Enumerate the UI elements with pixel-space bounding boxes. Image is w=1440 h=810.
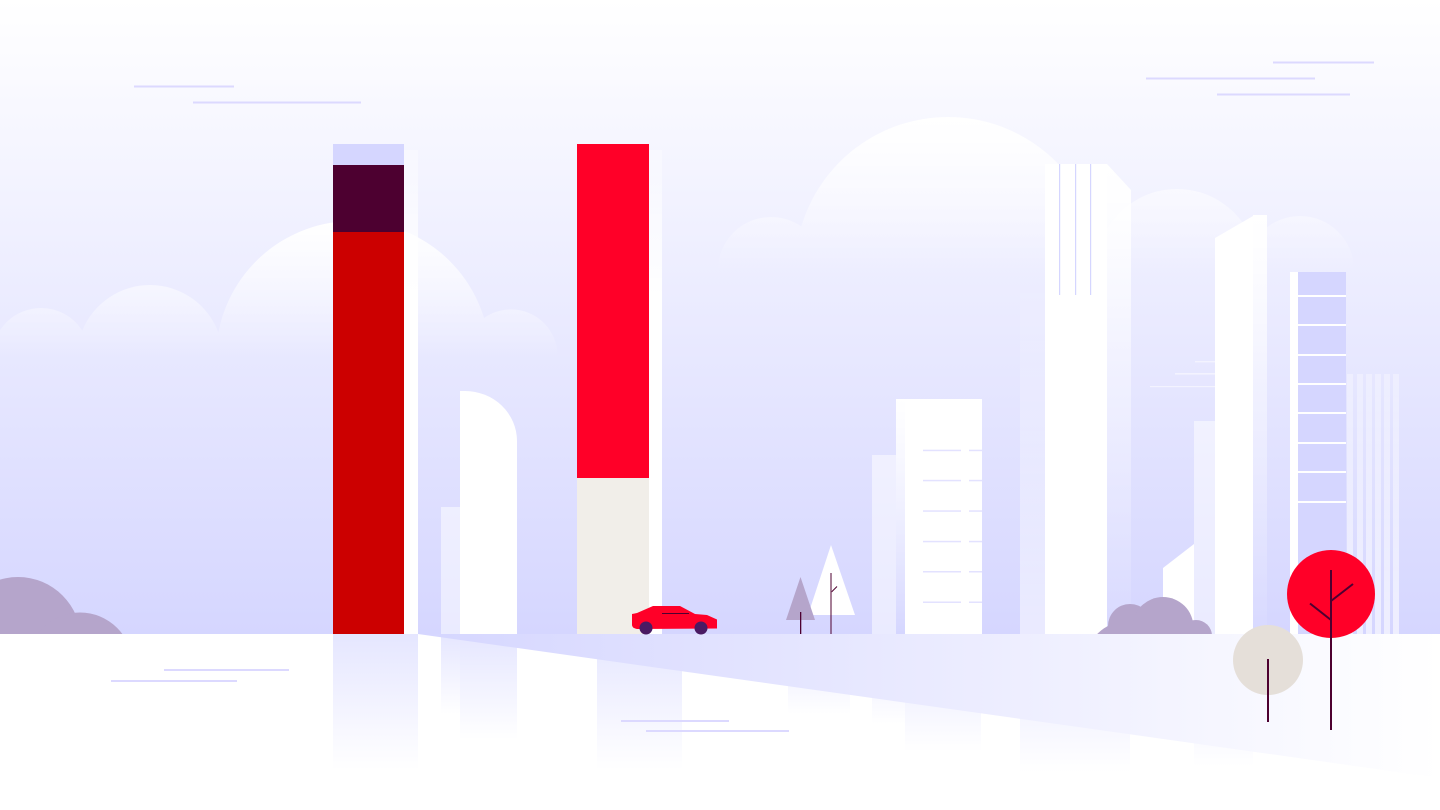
white tree branch	[832, 586, 837, 592]
car front wheel	[694, 622, 708, 634]
tall tower body	[1045, 164, 1107, 634]
bar one top segment	[333, 144, 404, 165]
arched building	[441, 391, 517, 634]
tall tower vertical lines	[1059, 164, 1091, 295]
purple tree crown	[786, 577, 815, 620]
right cloud	[716, 110, 1356, 272]
windowed tower	[1290, 272, 1346, 634]
windowed tower left strip	[1290, 272, 1298, 634]
windowed tower face	[1298, 272, 1346, 634]
arched building annex	[441, 507, 460, 634]
slanted tower body	[1215, 216, 1253, 634]
car rear wheel	[640, 622, 652, 634]
ground reflections	[333, 634, 1253, 773]
white triangle tree	[808, 545, 855, 634]
office left strip	[896, 399, 905, 634]
white tree crown	[808, 545, 855, 615]
purple tree trunk	[800, 612, 801, 634]
red tree trunk and branches	[1310, 570, 1353, 730]
car body	[632, 606, 717, 629]
beige tree crown	[1233, 625, 1303, 695]
bar two side face	[649, 150, 662, 634]
sky dashes	[134, 62, 1374, 104]
red round tree	[1287, 550, 1375, 730]
striped background tower	[1347, 374, 1399, 634]
tall tower side face	[1107, 164, 1131, 634]
bar one bottom segment	[333, 232, 404, 634]
purple triangle tree	[786, 577, 815, 634]
beige round tree	[1233, 625, 1303, 722]
stacked bar two	[577, 144, 662, 634]
perspective shadow on ground	[418, 634, 1440, 778]
slanted tower side face	[1253, 215, 1267, 634]
sky background	[0, 0, 1440, 634]
office annex	[872, 455, 896, 634]
left cloud	[107, 222, 476, 300]
beige tree trunk	[1267, 659, 1269, 722]
right bush	[1097, 597, 1212, 634]
office body	[905, 399, 982, 634]
tall tower left strip	[1020, 293, 1045, 634]
car window line	[662, 613, 689, 614]
bar one middle segment	[333, 165, 404, 232]
ground dashes	[111, 669, 789, 732]
arched building body	[460, 391, 517, 634]
red tree crown	[1287, 550, 1375, 638]
tall tower	[1020, 164, 1131, 634]
slanted tower	[1194, 215, 1267, 634]
stacked bar one	[333, 144, 418, 634]
slanted tower annex	[1194, 421, 1215, 634]
bar two bottom segment	[577, 478, 649, 634]
small pitched house	[1163, 544, 1194, 634]
windowed tower floor lines	[1298, 295, 1346, 503]
office building	[872, 399, 982, 634]
bar one side face	[404, 150, 418, 634]
car	[632, 606, 717, 634]
office floor lines	[923, 450, 982, 603]
white tree trunk	[830, 573, 832, 634]
slanted tower haze lines	[1150, 361, 1240, 387]
left bush	[0, 577, 122, 634]
bar two top segment	[577, 144, 649, 478]
